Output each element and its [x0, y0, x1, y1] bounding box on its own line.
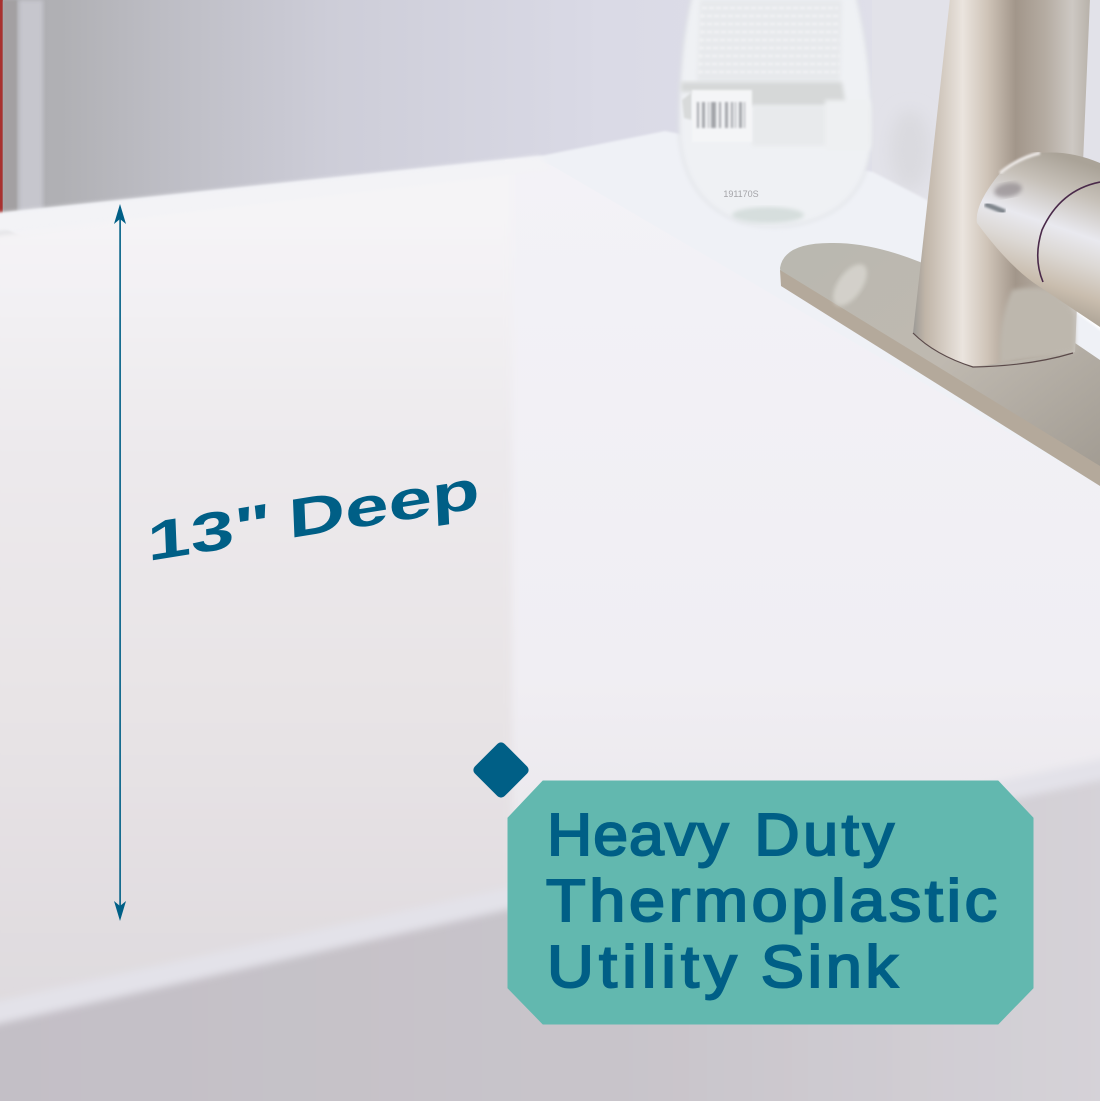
background wall	[0, 0, 1100, 260]
sink front apron	[0, 762, 1100, 1101]
callout text: Heavy Duty	[547, 802, 898, 868]
sink basin right wall	[505, 160, 1100, 915]
barcode	[697, 102, 745, 128]
callout badge	[508, 781, 1033, 1024]
sink front rim highlight	[0, 755, 1100, 1028]
sink basin left wall	[0, 168, 512, 1030]
soap bottle	[679, 0, 872, 227]
sink deck	[0, 131, 1100, 520]
faucet column	[913, 0, 1090, 367]
bottle printed panel	[697, 0, 842, 82]
callout text: Utility Sink	[547, 935, 901, 1000]
bottle label	[692, 90, 752, 142]
sink back rim	[0, 156, 552, 235]
depth arrow	[114, 204, 126, 921]
callout text: Thermoplastic	[546, 869, 1001, 934]
callout text	[546, 802, 1001, 1000]
product callout	[508, 781, 1033, 1024]
depth label: 13" Deep	[146, 458, 481, 573]
faucet deck plate	[780, 243, 1100, 485]
faucet spout arm	[977, 152, 1100, 327]
diamond marker	[471, 740, 531, 800]
bottle embossed text: 191170S	[723, 189, 759, 199]
spout ring	[1038, 182, 1100, 282]
faucet	[780, 0, 1100, 486]
